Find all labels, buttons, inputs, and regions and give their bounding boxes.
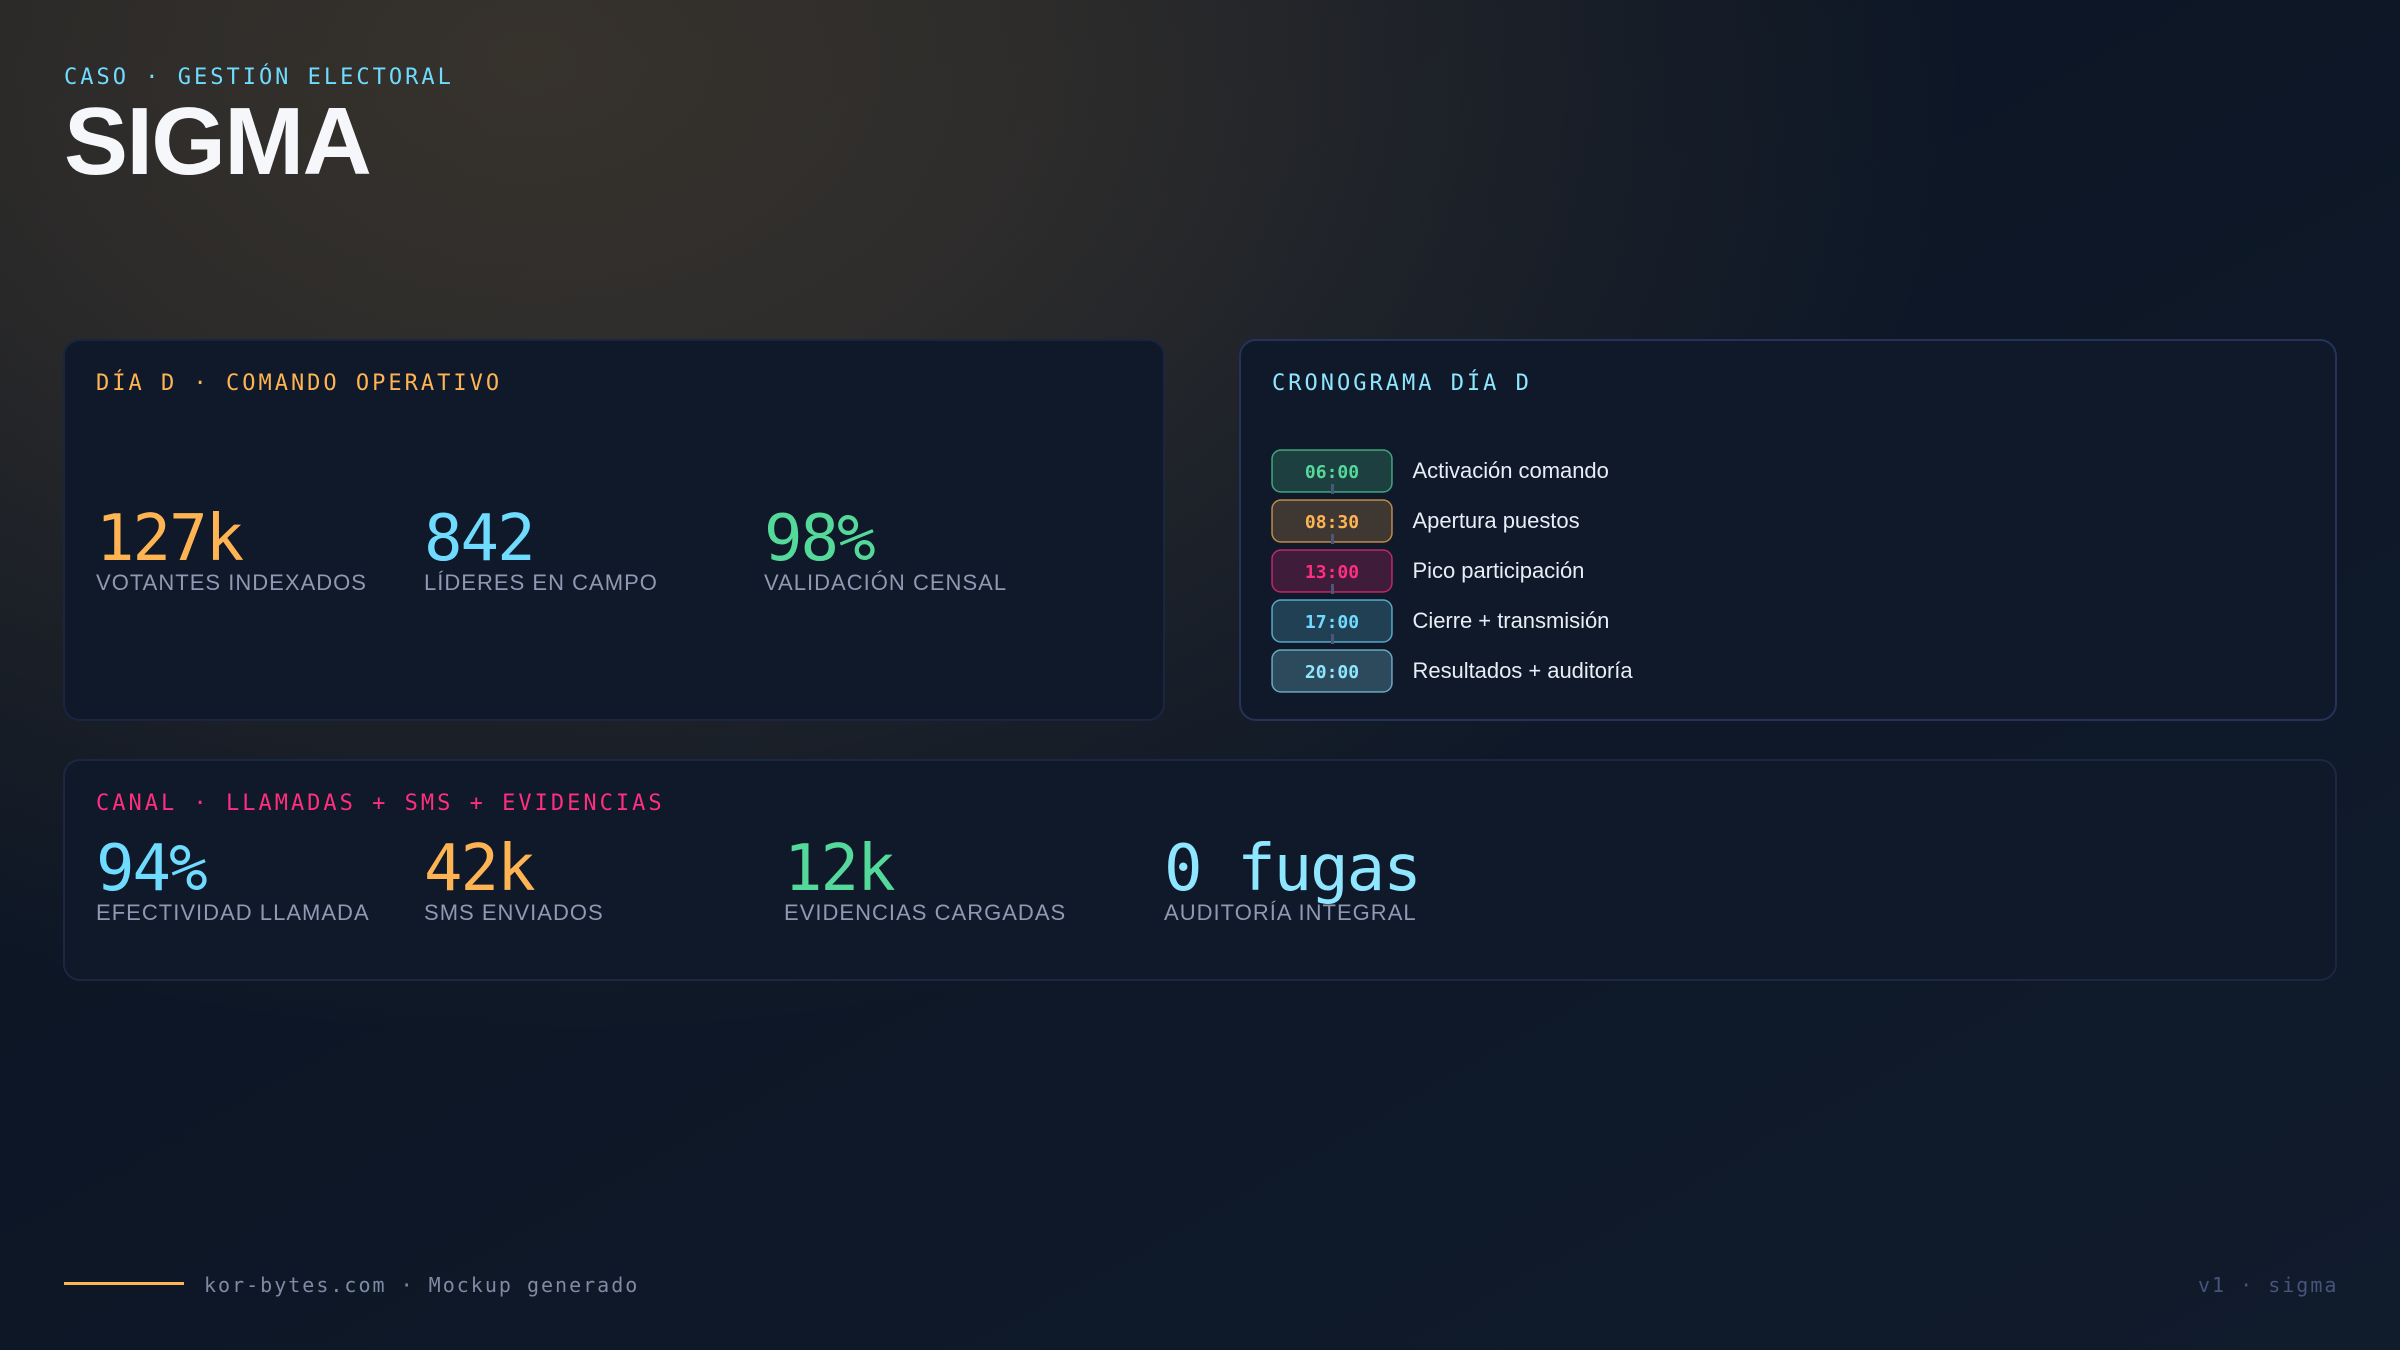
stat: evidencias cargadas: 12k	[784, 832, 895, 906]
title: SIGMA	[64, 88, 370, 195]
timeline row 17:00	[1272, 600, 1609, 642]
panel heading: cronograma: CRONOGRAMA DÍA D	[1272, 370, 1532, 396]
stat: votantes indexados: 127k	[96, 502, 244, 576]
stat: evidencias cargadas: EVIDENCIAS CARGADAS	[784, 900, 1066, 925]
timeline row 06:00	[1272, 450, 1609, 492]
timeline row 08:30: Apertura puestos	[1412, 508, 1580, 533]
timeline row 20:00	[1272, 650, 1633, 692]
timeline row 08:30: 08:30	[1305, 512, 1359, 533]
panel heading: comando operativo: DÍA D · COMANDO OPERATIVO	[96, 370, 502, 396]
stat: sms enviados: SMS ENVIADOS	[424, 900, 604, 925]
timeline row 20:00: 20:00	[1305, 662, 1359, 683]
footer version: v1 · sigma	[2198, 1273, 2338, 1297]
stat: efectividad llamada: 94%	[96, 832, 207, 906]
timeline row 06:00: Activación comando	[1412, 458, 1609, 483]
timeline row 20:00: Resultados + auditoría	[1412, 658, 1633, 683]
panel: comando operativo	[64, 340, 1164, 720]
stat: efectividad llamada: EFECTIVIDAD LLAMADA	[96, 900, 370, 925]
timeline row 13:00: Pico participación	[1412, 558, 1584, 583]
footer accent line	[64, 1282, 184, 1285]
stat: líderes en campo	[424, 502, 658, 595]
stat: sms enviados	[424, 832, 604, 925]
stat: líderes en campo: LÍDERES EN CAMPO	[424, 570, 658, 595]
timeline row 06:00: 06:00	[1305, 462, 1359, 483]
timeline row 17:00: Cierre + transmisión	[1412, 608, 1609, 633]
timeline connectors	[1331, 484, 1334, 644]
stat: votantes indexados: VOTANTES INDEXADOS	[96, 570, 367, 595]
stat: evidencias cargadas	[784, 832, 1066, 925]
header eyebrow: CASO · GESTIÓN ELECTORAL	[64, 64, 454, 90]
stat: efectividad llamada	[96, 832, 370, 925]
stat: votantes indexados	[96, 502, 367, 595]
stat: validación censal	[764, 502, 1007, 595]
timeline row 13:00: 13:00	[1305, 562, 1359, 583]
stat: líderes en campo: 842	[424, 502, 534, 576]
panel: cronograma	[1240, 340, 2336, 720]
stat: validación censal: VALIDACIÓN CENSAL	[764, 570, 1007, 595]
stat: auditoría integral: 0 fugas	[1164, 832, 1420, 906]
stat: sms enviados: 42k	[424, 832, 535, 906]
panel: canal	[64, 760, 2336, 980]
stat: auditoría integral: AUDITORÍA INTEGRAL	[1164, 900, 1417, 925]
panel heading: canal: CANAL · LLAMADAS + SMS + EVIDENCIAS	[96, 791, 665, 816]
stat: validación censal: 98%	[764, 502, 875, 576]
footer text: kor-bytes.com · Mockup generado	[204, 1273, 639, 1297]
timeline row 17:00: 17:00	[1305, 612, 1359, 633]
timeline row 08:30	[1272, 500, 1580, 542]
timeline row 13:00	[1272, 550, 1584, 592]
